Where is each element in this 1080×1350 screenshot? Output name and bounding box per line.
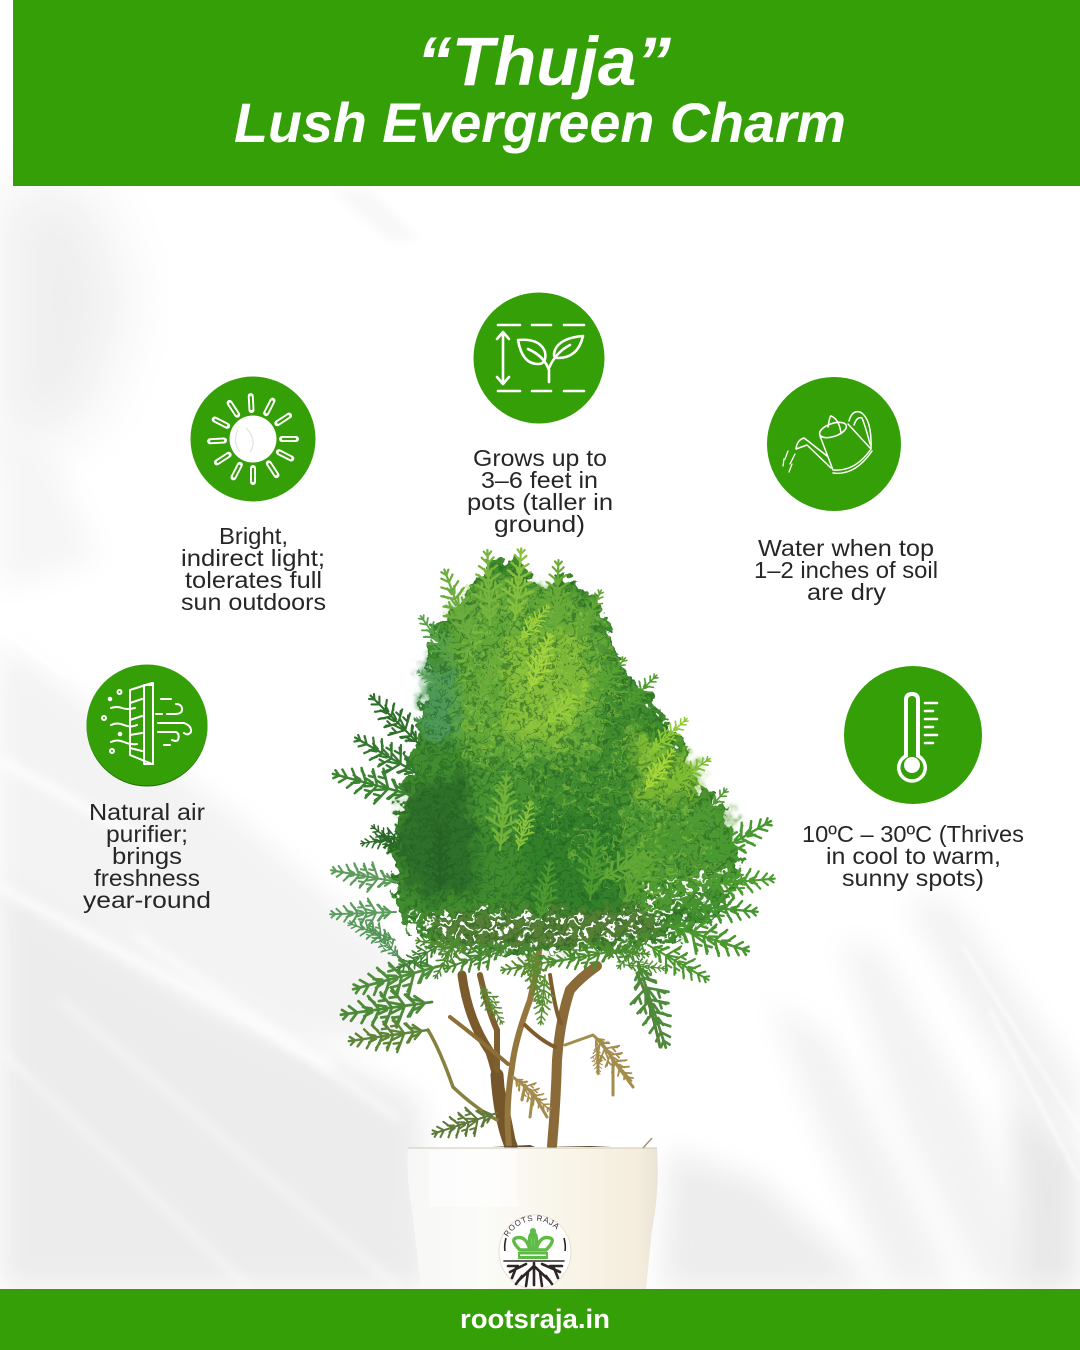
- text: height: [467, 445, 613, 537]
- footer band: [0, 1289, 1080, 1350]
- text: air: purifier;: [106, 821, 188, 847]
- text: temperature: in cool to warm,: [826, 843, 1001, 869]
- crown fronds: [410, 547, 736, 838]
- pot logo: Roots Raja: ROOTS RAJA: [504, 1215, 558, 1237]
- crown: [514, 1233, 552, 1250]
- side fronds: [328, 685, 780, 1059]
- text: light: [181, 523, 326, 615]
- text: air: [83, 799, 211, 913]
- plant foliage: [328, 547, 780, 1148]
- text: light: indirect light;: [181, 545, 325, 571]
- title: “Thuja”: [417, 23, 671, 100]
- plant trunks and branches: [428, 945, 660, 1146]
- text: light: tolerates full: [185, 567, 322, 593]
- text: height: ground): [494, 511, 585, 537]
- text: air: year-round: [83, 887, 211, 913]
- text: air: brings: [112, 843, 182, 869]
- text: water: Water when top: [758, 535, 934, 561]
- text: temperature: [802, 821, 1024, 891]
- text: air: Natural air: [89, 799, 205, 825]
- text: height: pots (taller in: [467, 489, 613, 515]
- footer text: rootsraja.in: [460, 1304, 610, 1334]
- icon: watering can: [767, 377, 901, 511]
- text: air: freshness: [94, 865, 200, 891]
- text: height: 3–6 feet in: [481, 467, 598, 493]
- lower fronds: [414, 923, 666, 1148]
- title: Lush Evergreen Charm: [234, 91, 846, 154]
- text: temperature: sunny spots): [842, 865, 984, 891]
- foliage body: [390, 560, 742, 955]
- title: [234, 23, 846, 154]
- roots: [504, 1261, 564, 1286]
- text: water: are dry: [807, 579, 886, 605]
- text: water: 1–2 inches of soil: [754, 557, 938, 583]
- header band: [13, 0, 1080, 186]
- panel: air: [83, 664, 211, 913]
- panel: height: [467, 292, 613, 537]
- icon: sun: [190, 376, 316, 502]
- text: water: [754, 535, 938, 605]
- icon: air purifier: [86, 664, 208, 786]
- panel: temperature: [802, 666, 1024, 891]
- panel: water: [754, 377, 938, 605]
- centre fronds: [415, 774, 711, 922]
- text: temperature: 10ºC – 30ºC (Thrives: [802, 821, 1024, 847]
- pot: [408, 1138, 658, 1289]
- text: light: Bright,: [219, 523, 288, 549]
- icon: thermometer: [844, 666, 982, 804]
- icon: plant height: [474, 292, 604, 424]
- text: height: Grows up to: [473, 445, 607, 471]
- text: light: sun outdoors: [181, 589, 326, 615]
- panel: light: [181, 376, 326, 615]
- pot logo: Roots Raja: [498, 1214, 572, 1289]
